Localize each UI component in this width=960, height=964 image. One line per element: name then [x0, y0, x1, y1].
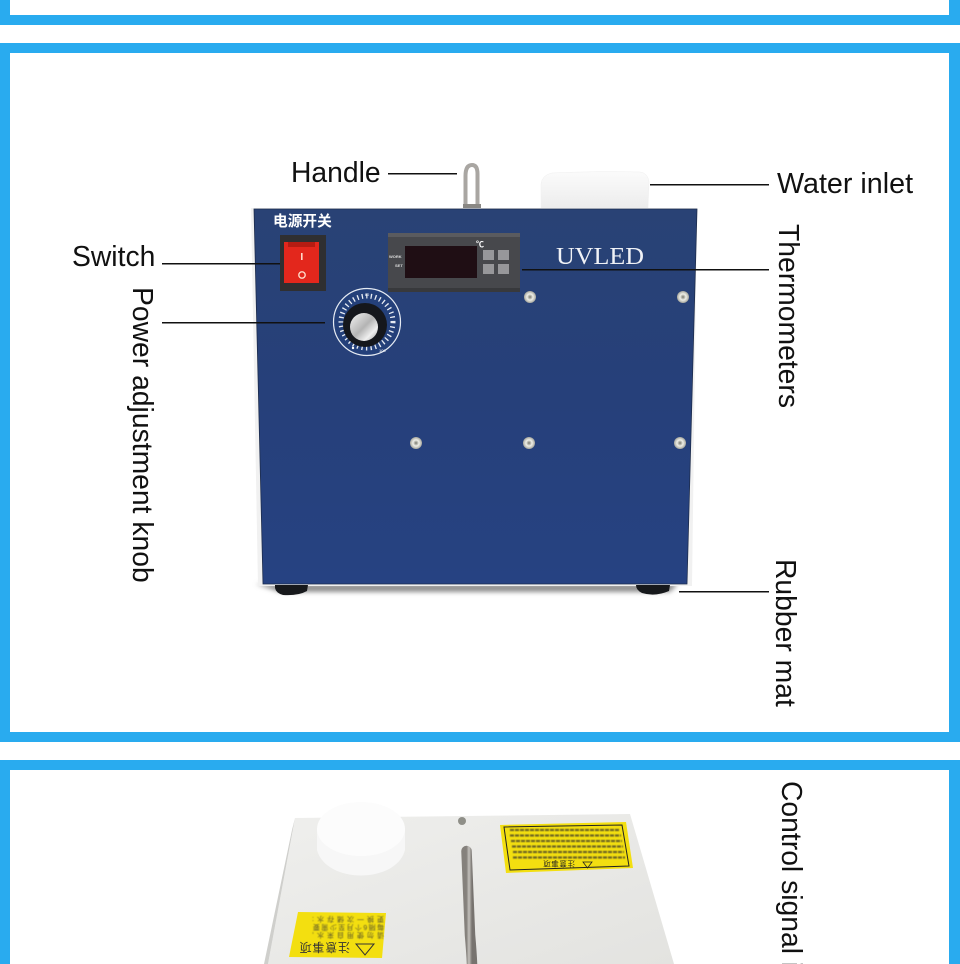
- text: UVLED logo: UVLED: [556, 243, 644, 270]
- warning label: left: 请勿使用自来水,: [309, 931, 384, 940]
- icon: digital thermostat: SET: [395, 263, 403, 268]
- label: Thermometers: Thermometers: [773, 224, 805, 408]
- icon: water inlet cap: [541, 172, 649, 208]
- icon: digital thermostat: ℃: [476, 240, 484, 249]
- label: Water inlet: Water inlet: [777, 168, 913, 200]
- label: Control signal interface (clipped at page edge): Control signal i: [776, 781, 808, 964]
- label: Switch: Switch: [72, 240, 155, 272]
- device top surface: [268, 814, 674, 964]
- device front panel: [251, 208, 697, 595]
- warning label: left: [289, 912, 386, 958]
- warning label: right: [500, 822, 633, 873]
- icon: power adjustment knob: [334, 288, 400, 356]
- device top view: [264, 802, 674, 964]
- icon: power adjustment knob: 100: [379, 348, 386, 353]
- icon: digital thermostat: [388, 233, 520, 292]
- panel: previous section frame: [0, 0, 960, 25]
- panel: top view frame: [0, 760, 960, 964]
- icon: left rubber foot: [275, 585, 308, 595]
- icon: top water inlet cap: [317, 817, 405, 876]
- icon: power adjustment knob: 60: [365, 292, 370, 297]
- icons: panel screws: [410, 291, 689, 449]
- label: Power adjustment knob: Power adjustment knob: [127, 287, 159, 583]
- icon: digital thermostat: WORK: [389, 254, 402, 259]
- label: Rubber mat: Rubber mat: [770, 559, 802, 707]
- warning label: right: 注意事项: [543, 859, 575, 869]
- warning label: left: 每隔6个月至少需要: [312, 923, 384, 932]
- icon: handle: [463, 165, 481, 208]
- chinese switch caption: 电源开关: [273, 213, 332, 230]
- panel: front view frame: [0, 43, 960, 742]
- icon: top screw: [458, 817, 466, 825]
- warning label: left: 注意事项: [299, 940, 350, 955]
- icon: top handle: [466, 851, 472, 964]
- icon: red rocker switch: [280, 235, 326, 291]
- icon: right rubber foot: [636, 585, 670, 595]
- label: Handle: Handle: [291, 156, 381, 188]
- warning label: left: 更换一次储存水:: [309, 915, 384, 924]
